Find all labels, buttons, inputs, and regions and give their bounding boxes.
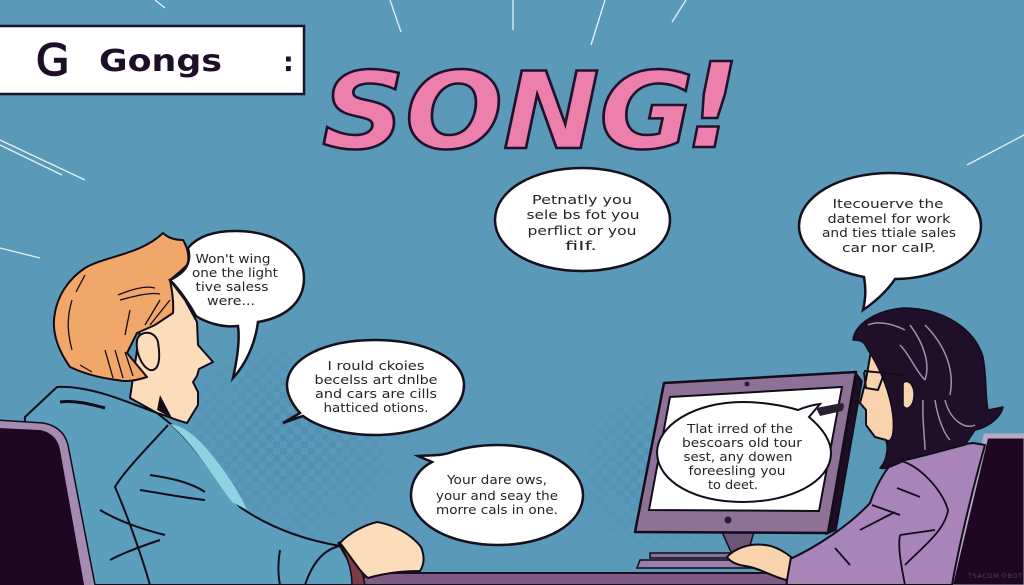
- action rays: [0, 0, 1024, 258]
- monitor: Tlat irred of the: [686, 421, 793, 436]
- woman chair: [950, 436, 1024, 585]
- speech bubble: top right: car nor caIP.: [842, 240, 936, 255]
- man neck shadow: [157, 395, 172, 418]
- speech bubble: middle left: and cars are cills: [315, 386, 437, 401]
- man face and neck: [130, 280, 213, 423]
- brand name: Gongs: [99, 44, 222, 79]
- woman glasses: [864, 371, 905, 390]
- woman neck and face: [860, 345, 930, 455]
- hair strands: [68, 275, 170, 378]
- sleeve folds: [835, 460, 948, 585]
- keyboard: [637, 560, 755, 568]
- man wrist cuff: [338, 540, 365, 585]
- stylus: [816, 403, 844, 416]
- logo letter G: G: [36, 36, 69, 86]
- monitor frame: [635, 372, 856, 533]
- speech bubble: top centre: Petnatly you: [532, 192, 632, 207]
- man ear: [137, 333, 159, 370]
- monitor screen: [649, 387, 842, 511]
- speech bubble: lower centre: morre cals in one.: [436, 502, 558, 517]
- speech bubble: man: were...: [207, 293, 255, 308]
- speech bubble: top centre: sele bs fot you: [526, 207, 640, 222]
- speech bubble: middle left: becelss art dnlbe: [314, 372, 438, 387]
- man jacket: [20, 387, 362, 585]
- speech bubble: top centre: fiIf.: [565, 238, 597, 253]
- speech bubble: middle left: [283, 340, 464, 435]
- speech bubble: top right: [799, 173, 981, 310]
- title: !: [685, 37, 740, 175]
- desk: [358, 573, 900, 585]
- woman hair: [853, 308, 1003, 468]
- speech bubble: middle left: hatticed otions.: [324, 400, 428, 415]
- title: SONG: [322, 50, 694, 173]
- speech bubble: top right: and ties ttiale sales: [822, 225, 956, 240]
- woman hand: [727, 545, 791, 580]
- speech bubble: man: Won't wing: [196, 251, 270, 266]
- man chair: [0, 420, 96, 585]
- man hair: [54, 233, 188, 381]
- speech bubble: top right: datemel for work: [828, 211, 951, 226]
- man character: [20, 233, 424, 585]
- speech bubble: lower centre: your and seay the: [436, 488, 558, 503]
- monitor: bescoars old tour: [682, 435, 803, 450]
- speech bubble: top centre: perflict or you: [528, 223, 636, 238]
- speech bubble: man: tive saless: [196, 279, 268, 294]
- jacket highlight: [170, 424, 247, 510]
- speech bubble: man: one the light: [192, 265, 278, 280]
- header colon: :: [283, 47, 294, 78]
- hair highlights: [868, 323, 975, 450]
- monitor side: [826, 372, 862, 534]
- speech bubble: man: [170, 231, 304, 378]
- monitor: foreesling you: [688, 463, 786, 478]
- speech bubble: top right: Itecouerve the: [832, 196, 944, 211]
- monitor base: [650, 553, 735, 558]
- speech bubble: middle left: I rould ckoies: [328, 358, 424, 373]
- speech bubble: lower centre: [411, 445, 583, 545]
- speech bubble: top centre: [495, 168, 670, 271]
- corner caption: TSACOM OBOT: [967, 572, 1022, 580]
- woman character: [727, 308, 1003, 585]
- woman body: [786, 443, 985, 585]
- woman ear: [903, 381, 914, 408]
- jacket folds: [60, 401, 340, 585]
- screen speech bubble: [657, 402, 831, 502]
- header bar: [0, 26, 304, 94]
- webcam and button: [724, 382, 750, 524]
- monitor: sest, any dowen: [684, 449, 792, 464]
- speech bubble: lower centre: Your dare ows,: [446, 472, 547, 487]
- monitor: to deet.: [708, 477, 758, 492]
- monitor: [635, 372, 862, 568]
- monitor stand: [722, 532, 754, 552]
- man hand: [340, 522, 424, 578]
